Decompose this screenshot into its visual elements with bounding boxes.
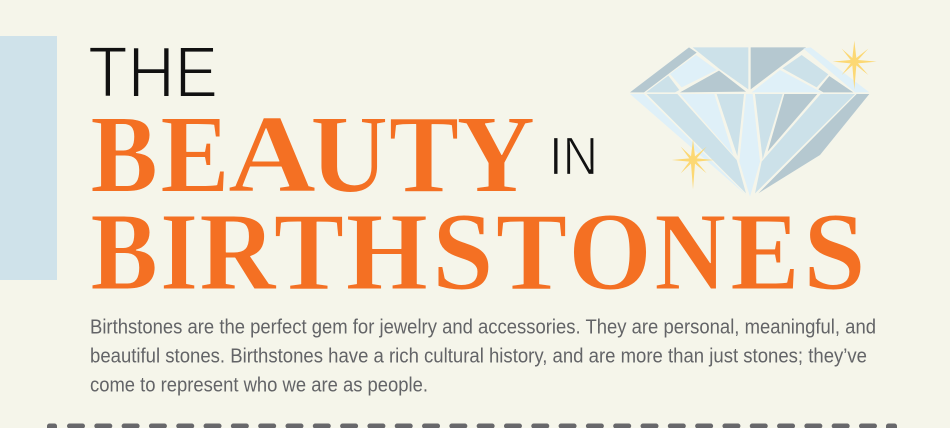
title word: BIRTHSTONES: R bbox=[199, 191, 277, 314]
title word: BIRTHSTONES: T bbox=[496, 191, 567, 314]
intro paragraph bbox=[90, 316, 876, 396]
title word: BIRTHSTONES: O bbox=[568, 191, 652, 314]
title word: BIRTHSTONES: E bbox=[730, 191, 800, 314]
title word: BEAUTY bbox=[90, 94, 535, 216]
title word: IN: IN bbox=[549, 126, 598, 186]
light blue side panel bbox=[0, 36, 57, 280]
icon: bottom sparkle bbox=[672, 139, 714, 189]
title word: BIRTHSTONES: S bbox=[432, 191, 494, 314]
icon: top sparkle bbox=[833, 41, 877, 89]
title word: BIRTHSTONES: I bbox=[160, 191, 198, 314]
intro paragraph: beautiful stones. Birthstones have a rich cultural history, and are more than just stones; they’ve bbox=[90, 344, 867, 368]
title word: BEAUTY: E bbox=[160, 94, 230, 216]
diamond pavilion facets bbox=[630, 94, 869, 197]
title word: BIRTHSTONES: S bbox=[803, 191, 866, 314]
title word: BIRTHSTONES bbox=[90, 191, 866, 314]
title word: BIRTHSTONES: B bbox=[90, 191, 158, 314]
diamond crown facets bbox=[630, 47, 869, 92]
title word: THE: THE bbox=[88, 32, 218, 113]
icon: diamond bbox=[630, 41, 877, 197]
title word: BEAUTY: U bbox=[310, 94, 388, 216]
title word: BEAUTY: Y bbox=[456, 94, 535, 216]
title word: BIRTHSTONES: T bbox=[274, 191, 344, 314]
title word: BIRTHSTONES: N bbox=[654, 191, 726, 314]
title word: BIRTHSTONES: H bbox=[346, 191, 428, 314]
intro paragraph: Birthstones are the perfect gem for jewelry and accessories. They are personal, meaningful, and bbox=[90, 316, 876, 338]
dashed divider bbox=[47, 424, 897, 428]
title word: BEAUTY: B bbox=[90, 94, 158, 216]
intro paragraph: come to represent who we are as people. bbox=[90, 374, 428, 396]
title word: BEAUTY: A bbox=[228, 94, 316, 216]
title word: BEAUTY: T bbox=[389, 94, 459, 216]
